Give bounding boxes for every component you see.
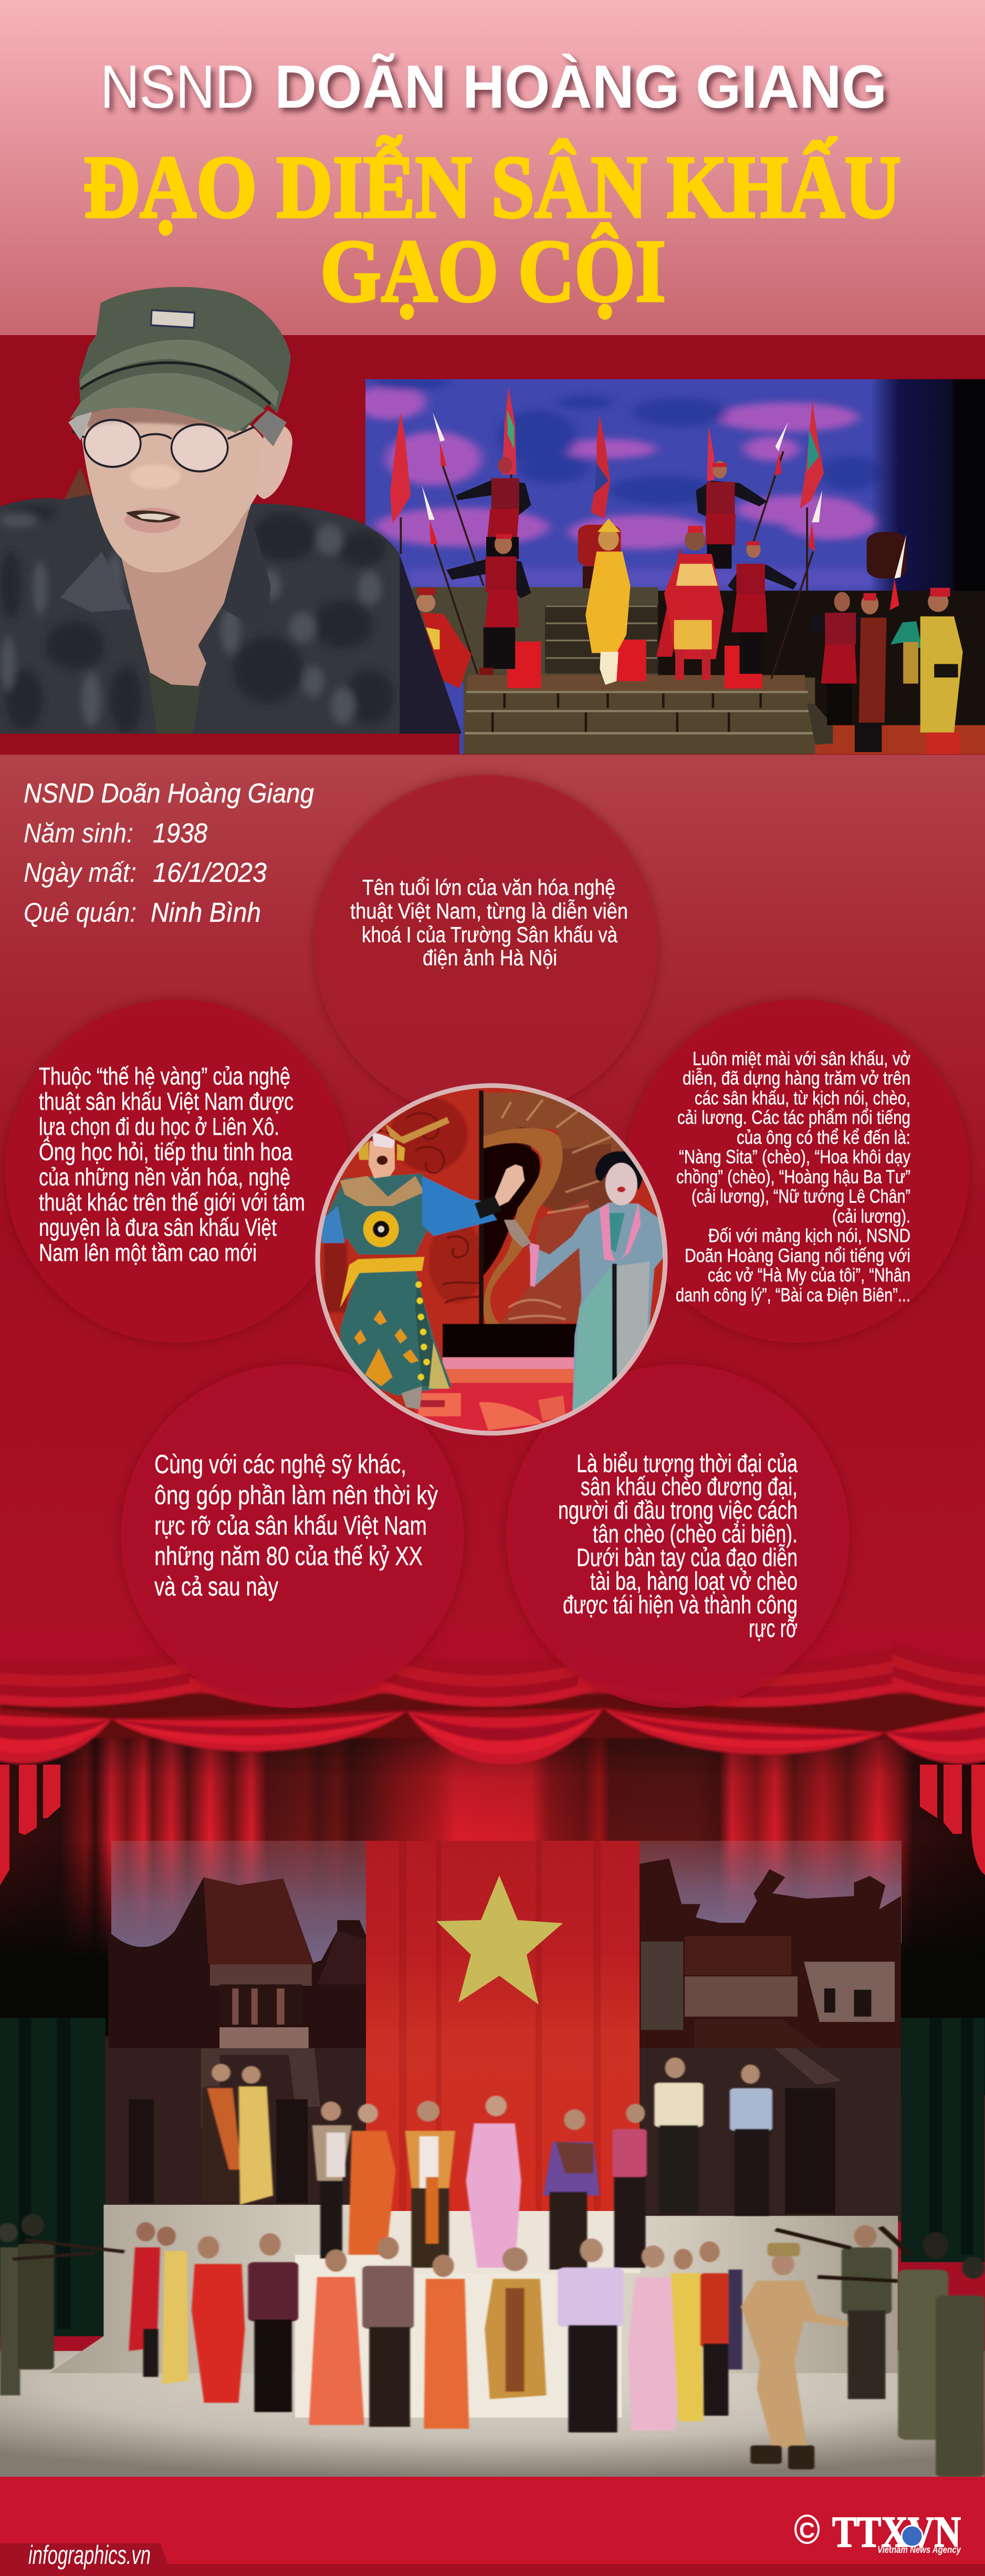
circle: bottom left era bbox=[121, 1364, 464, 1708]
text: right circle: chồng” (chèo), “Hoàng hậu Ba Tư” bbox=[676, 1166, 910, 1187]
camo patches bbox=[0, 505, 394, 733]
upper swag 5 bbox=[893, 1628, 985, 1707]
dragon body bbox=[484, 1128, 563, 1329]
text: left circle: thuật sân khấu Việt Nam được bbox=[39, 1088, 294, 1115]
lower swag center bbox=[407, 1708, 603, 1765]
front soldier left bbox=[446, 534, 531, 675]
text: left circle bbox=[39, 1062, 305, 1266]
floor bbox=[0, 2351, 984, 2478]
home town bbox=[24, 898, 261, 928]
red stage curtain folds bbox=[0, 1733, 985, 1959]
cap brim bbox=[70, 373, 265, 433]
text: bottom right circle: Là biểu tượng thời đại của bbox=[577, 1450, 798, 1478]
text: right circle: của ông có thể kể đến là: bbox=[737, 1127, 910, 1148]
red general bbox=[656, 526, 724, 680]
lower red strip under portrait bbox=[0, 734, 459, 755]
birth year: 1938 bbox=[153, 818, 207, 849]
flag star bbox=[436, 1875, 563, 2005]
black band bbox=[443, 1324, 579, 1358]
stage photo: cheo performance bbox=[354, 376, 985, 759]
hair behind bbox=[64, 467, 91, 499]
shirt bbox=[0, 495, 400, 734]
soldiers left bbox=[0, 2214, 124, 2395]
brick wall left bbox=[412, 587, 658, 682]
home town: Quê quán: bbox=[24, 898, 137, 928]
back soldier left bbox=[456, 457, 531, 559]
lower swag far left bbox=[0, 1702, 111, 1764]
grey hair bbox=[68, 404, 287, 446]
death date bbox=[24, 858, 267, 888]
text: right circle bbox=[676, 1048, 910, 1306]
text: left circle: thuật khác trên thế giới với tâm bbox=[39, 1188, 305, 1216]
birth year: Năm sinh: bbox=[24, 818, 133, 849]
soldiers right bbox=[776, 2225, 984, 2477]
circle: right works bbox=[626, 999, 969, 1343]
cap bbox=[79, 287, 291, 431]
text: right circle: Đối với mảng kịch nói, NSND bbox=[708, 1225, 910, 1246]
cast on stage bbox=[0, 2058, 984, 2477]
agency wordmark: TTXVN bbox=[832, 2508, 961, 2557]
circle: bottom right symbol bbox=[506, 1364, 850, 1708]
stage trim bbox=[443, 1358, 579, 1369]
text: top circle: điện ảnh Hà Nội bbox=[423, 945, 557, 970]
upper swag 4 bbox=[578, 1628, 924, 1707]
flags bbox=[390, 412, 411, 524]
upper swag 1 bbox=[0, 1628, 221, 1707]
right group: green cloth bbox=[890, 621, 923, 649]
text: right circle: Luôn miệt mài với sân khấu, vở bbox=[693, 1048, 910, 1069]
cap badge bbox=[151, 310, 194, 328]
back soldier right bbox=[696, 461, 768, 569]
sheer backdrop right bbox=[638, 1841, 902, 1943]
lower swag left bbox=[111, 1711, 407, 1751]
dark wall right bbox=[658, 591, 985, 727]
title: name: NSND bbox=[100, 53, 254, 121]
face bbox=[80, 403, 268, 572]
text: bottom left circle: ông góp phần làm nên thời kỳ bbox=[154, 1480, 438, 1510]
dark center panel bbox=[481, 1095, 531, 1164]
upper row performers bbox=[202, 2058, 772, 2269]
circle: left study abroad bbox=[5, 999, 349, 1343]
painted house right bbox=[640, 1859, 901, 2048]
text: bottom left circle: Cùng với các nghệ sỹ khác, bbox=[154, 1449, 406, 1479]
side fringes left bbox=[0, 1765, 60, 1885]
man: legs bbox=[402, 1386, 422, 1410]
carved panel bbox=[315, 1077, 672, 1439]
text: top circle bbox=[350, 875, 628, 970]
text: right circle: (cải lương), “Nữ tướng Lê Chân” bbox=[691, 1185, 910, 1207]
center circular photo bbox=[315, 1077, 672, 1439]
backstage base bbox=[0, 1728, 985, 2095]
info panel background bbox=[0, 755, 985, 1700]
blades bbox=[422, 412, 906, 578]
curtain valance bbox=[0, 1628, 985, 1765]
text: bottom right circle: sân khấu chèo đương đại, bbox=[581, 1473, 798, 1501]
drums bbox=[578, 525, 621, 566]
green side curtains bbox=[0, 2018, 106, 2336]
upper swag 2 bbox=[189, 1628, 399, 1707]
text: bottom left circle: những năm 80 của thế kỷ XX bbox=[154, 1541, 423, 1571]
text: bottom right circle: rực rỡ bbox=[749, 1615, 798, 1643]
national flag banner bbox=[366, 1841, 640, 2211]
lower swag right bbox=[603, 1708, 885, 1755]
right group: soldier bbox=[811, 592, 867, 725]
upper swag 3 bbox=[368, 1628, 609, 1707]
right group: brown robe bbox=[855, 593, 886, 752]
agency globe bbox=[902, 2526, 923, 2547]
glasses bbox=[72, 420, 255, 472]
sheer backdrop left bbox=[111, 1841, 369, 1985]
platform bbox=[49, 2205, 898, 2373]
orange floor bbox=[815, 725, 985, 754]
woman: hand bbox=[504, 1220, 531, 1248]
painted house left bbox=[108, 1877, 368, 2048]
right dark curtain bbox=[873, 379, 985, 591]
text: top circle: thuật Việt Nam, từng là diễn viên bbox=[350, 899, 628, 923]
flame tongues bbox=[484, 1093, 630, 1326]
text: left circle: nguyện là đưa sân khấu Việt bbox=[39, 1214, 277, 1241]
man: yellow sash bbox=[340, 1257, 424, 1308]
dark red band bbox=[0, 335, 985, 755]
text: right circle: các vở “Hà My của tôi”, “Nhân bbox=[708, 1264, 910, 1286]
text: left circle: Nam lên một tầm cao mới bbox=[39, 1239, 257, 1266]
undershirt bbox=[149, 672, 201, 734]
profile facts bbox=[24, 778, 314, 928]
text: right circle: danh công lý”, “Bài ca Điện Biên”... bbox=[676, 1284, 910, 1306]
title: yellow headline: GẠO CỘI bbox=[320, 222, 666, 320]
text: top circle: khoá I của Trường Sân khấu và bbox=[362, 922, 618, 947]
photo ring bbox=[318, 1086, 665, 1433]
text: bottom left circle: và cả sau này bbox=[154, 1572, 278, 1601]
text: right circle: các sân khấu, từ kịch nói, chèo, bbox=[695, 1087, 910, 1109]
man: sun emblem bbox=[363, 1211, 399, 1247]
text: bottom right circle: người đi đầu trong việc cách bbox=[558, 1497, 798, 1525]
text: top circle: Tên tuổi lớn của văn hóa nghệ bbox=[362, 875, 615, 900]
mouth bbox=[124, 507, 181, 533]
title: name: DOÃN HOÀNG GIANG bbox=[275, 53, 887, 121]
header background bbox=[0, 0, 985, 335]
lower swag far right bbox=[885, 1696, 985, 1764]
text: bottom right circle: tài ba, hàng loạt vở chèo bbox=[590, 1568, 798, 1595]
text: bottom right circle: Dưới bàn tay của đạo diễn bbox=[577, 1543, 798, 1572]
man: head and crown bbox=[369, 1139, 395, 1179]
text: right circle: diễn, đã dựng hàng trăm vở trên bbox=[683, 1067, 910, 1089]
backdrop bbox=[103, 2037, 371, 2210]
TTXVN logo bbox=[795, 2508, 961, 2557]
red boxes bbox=[507, 642, 541, 688]
collar bbox=[60, 552, 131, 612]
death date: 16/1/2023 bbox=[153, 858, 267, 888]
woman: robe bbox=[529, 1203, 666, 1416]
title: yellow headline bbox=[83, 136, 901, 320]
footer band bbox=[0, 2477, 985, 2576]
text: bottom right circle: tân chèo (chèo cải biên). bbox=[593, 1520, 798, 1548]
center yellow performer bbox=[585, 518, 631, 685]
man: robe bbox=[322, 1174, 434, 1255]
man: hand bbox=[495, 1164, 525, 1206]
man: skirt flames bbox=[354, 1310, 418, 1386]
death date: Ngày mất: bbox=[24, 858, 137, 888]
text: left circle: Ông học hỏi, tiếp thu tinh hoa bbox=[39, 1138, 292, 1165]
text: right circle: Doãn Hoàng Giang nổi tiếng với bbox=[685, 1245, 910, 1266]
text: bottom right circle: được tái hiện và thành công bbox=[563, 1591, 798, 1619]
name: NSND Doãn Hoàng Giang bbox=[24, 778, 314, 809]
spears bbox=[401, 451, 813, 679]
stairs bbox=[545, 605, 658, 673]
ear bbox=[256, 424, 292, 499]
navy wedge bbox=[399, 552, 462, 734]
circle: top biography bbox=[314, 775, 657, 1119]
left performer bbox=[416, 588, 471, 689]
side fringes right bbox=[920, 1765, 985, 1875]
text: bottom left circle: rực rỡ của sân khấu Việt Nam bbox=[154, 1511, 427, 1540]
right soldier bbox=[728, 541, 797, 674]
text: left circle: lựa chọn đi du học ở Liên Xô. bbox=[39, 1113, 279, 1140]
copyright mark bbox=[795, 2516, 819, 2543]
backdrop sky bbox=[365, 379, 898, 754]
copyright mark: C bbox=[799, 2518, 815, 2542]
text: right circle: cải lương. Các tác phẩm nổi tiếng bbox=[677, 1107, 910, 1128]
man: skirt bbox=[340, 1271, 452, 1395]
portrait: NSND Doan Hoang Giang bbox=[0, 287, 462, 734]
source url: infographics.vn bbox=[28, 2540, 151, 2570]
text: left circle: của những nền văn hóa, nghệ bbox=[39, 1163, 290, 1191]
text: left circle: Thuộc “thế hệ vàng” của nghệ bbox=[39, 1062, 290, 1090]
home town: Ninh Bình bbox=[151, 898, 261, 928]
shadow band behind swags bbox=[0, 1694, 985, 1738]
cap strap bbox=[80, 340, 279, 407]
stage photo: lower scene bbox=[0, 2018, 984, 2478]
lower row performers bbox=[129, 2222, 742, 2433]
forehead shadow bbox=[83, 405, 241, 431]
officer in khaki bbox=[741, 2243, 854, 2469]
footer bottom strip and source tab bbox=[0, 2540, 985, 2576]
birth year bbox=[24, 818, 207, 849]
nose and cheek bbox=[130, 464, 181, 488]
woman: head and hair bbox=[595, 1151, 643, 1190]
side step right bbox=[807, 703, 833, 745]
steps bbox=[464, 677, 815, 755]
text: right circle: (cải lương). bbox=[832, 1205, 910, 1227]
text: bottom right circle bbox=[558, 1450, 798, 1643]
text: right circle: “Nàng Sita” (chèo), “Hoa khôi dạy bbox=[679, 1146, 910, 1167]
right group: yellow robe bbox=[903, 588, 963, 755]
agency tagline: Vietnam News Agency bbox=[877, 2544, 961, 2555]
neck and chest bbox=[118, 500, 252, 686]
text: bottom left circle bbox=[154, 1449, 438, 1601]
